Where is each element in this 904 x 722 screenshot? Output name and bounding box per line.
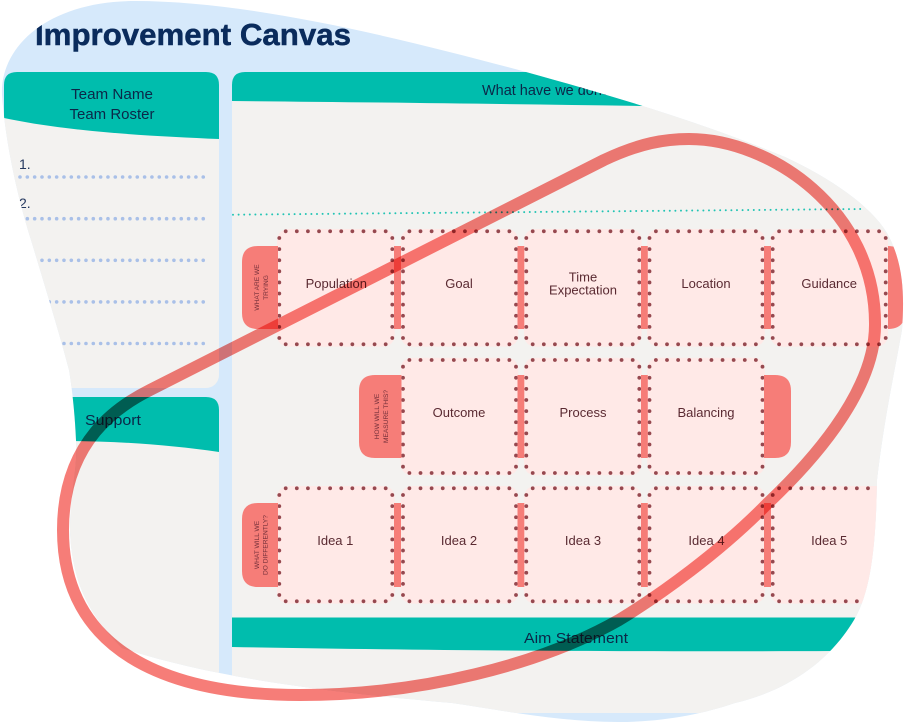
card: process: Process bbox=[560, 405, 607, 420]
panel: team bbox=[4, 72, 219, 388]
tab text line 2: MEASURE THIS? bbox=[383, 390, 390, 443]
roster lines bbox=[20, 177, 204, 344]
support label: Support bbox=[85, 412, 142, 429]
card: time expectation bbox=[524, 229, 642, 347]
card: process bbox=[524, 358, 642, 475]
connector bars bbox=[394, 246, 771, 587]
row 3 cards bbox=[277, 486, 888, 604]
team header bbox=[4, 72, 219, 139]
row 2 cards bbox=[401, 358, 765, 475]
card: idea 5: Idea 5 bbox=[811, 533, 847, 548]
title: Improvement Canvas bbox=[35, 17, 351, 52]
card: balancing: Balancing bbox=[677, 405, 735, 420]
card: idea 1 bbox=[277, 486, 395, 604]
card: idea 2: Idea 2 bbox=[441, 533, 477, 548]
card: time expectation: Time bbox=[569, 269, 597, 284]
team panel background bbox=[4, 118, 219, 388]
tab: how will we measure this bbox=[359, 375, 402, 458]
tab text line 2: TRYING bbox=[263, 275, 270, 300]
aim statement label: Aim Statement bbox=[524, 630, 629, 647]
panel: support bbox=[70, 397, 219, 673]
card: idea 3 bbox=[524, 486, 642, 604]
card: idea 1: Idea 1 bbox=[317, 533, 353, 548]
card: guidance bbox=[770, 229, 888, 347]
card: guidance: Guidance bbox=[801, 276, 857, 291]
tab text: HOW WILL WE bbox=[374, 393, 381, 439]
card: balancing bbox=[647, 358, 765, 475]
card: population: Population bbox=[306, 276, 367, 291]
card: idea 5 bbox=[770, 486, 888, 604]
tab text line 2: DO DIFFERENTLY? bbox=[262, 515, 270, 575]
panel: main canvas bbox=[232, 72, 904, 713]
tab shape bbox=[359, 375, 402, 458]
card: population bbox=[277, 229, 395, 347]
row 1 cards bbox=[277, 229, 888, 347]
team roster: Team Roster bbox=[70, 106, 155, 123]
team header band bbox=[4, 72, 219, 139]
aim statement band bbox=[232, 618, 904, 651]
tab: what are we trying bbox=[242, 246, 278, 329]
roster number 1: 1. bbox=[19, 156, 31, 172]
tab: right of guidance bbox=[888, 246, 904, 329]
card: outcome bbox=[401, 358, 518, 475]
roster number 2: 2. bbox=[19, 195, 31, 211]
tab: right of balancing bbox=[764, 375, 791, 458]
what have we done header band bbox=[232, 72, 642, 106]
card: idea 4: Idea 4 bbox=[688, 533, 725, 548]
tab: what will we do differently bbox=[242, 503, 278, 587]
support header band bbox=[60, 397, 219, 452]
card: idea 2 bbox=[401, 486, 518, 604]
what have we done heading: What have we done? bbox=[482, 82, 618, 99]
card: outcome: Outcome bbox=[433, 405, 485, 420]
tab text: WHAT ARE WE bbox=[254, 264, 261, 311]
tab shape bbox=[242, 246, 278, 329]
card: idea 4 bbox=[647, 486, 765, 604]
card: idea 3: Idea 3 bbox=[565, 533, 601, 548]
tab text: WHAT WILL WE bbox=[254, 520, 261, 569]
card: goal bbox=[401, 229, 518, 347]
tab shape bbox=[242, 503, 278, 587]
team name: Team Name bbox=[71, 86, 153, 103]
card: location bbox=[647, 229, 765, 347]
red loop outline bbox=[63, 139, 875, 695]
teal dotted line bbox=[233, 209, 863, 215]
card: time expectation: Expectation bbox=[549, 282, 617, 297]
card: location: Location bbox=[681, 276, 731, 291]
main panel background bbox=[232, 72, 904, 713]
support panel background bbox=[70, 441, 219, 673]
card: goal: Goal bbox=[445, 276, 473, 291]
